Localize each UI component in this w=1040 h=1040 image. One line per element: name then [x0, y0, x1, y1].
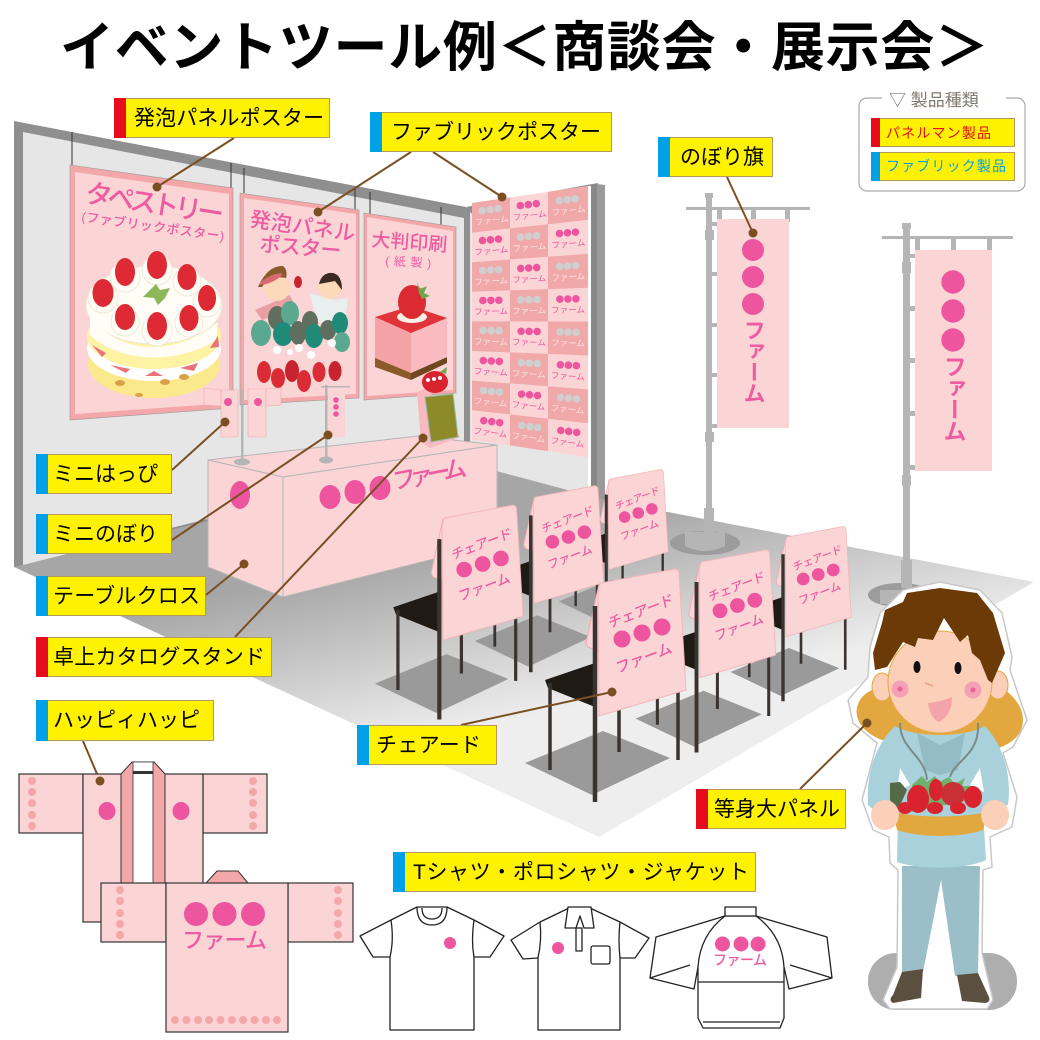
product type legend — [859, 90, 1025, 191]
label: life-size panel — [696, 789, 846, 829]
booth walls — [14, 121, 605, 567]
chair: back row left: チェアード — [450, 525, 513, 563]
label: nobori flag — [658, 137, 772, 177]
children and strawberries illustration — [251, 266, 350, 392]
fabric poster checker wall: ファーム — [512, 305, 546, 316]
shoes — [890, 969, 923, 1003]
label: foam panel poster — [114, 98, 330, 138]
jacket — [868, 726, 1009, 868]
leader dot: happi — [96, 776, 104, 786]
fabric poster checker wall: ファーム — [551, 204, 586, 218]
chair: front row middle — [636, 550, 776, 753]
poster: tapestry with cake — [70, 165, 233, 420]
hair — [873, 588, 1005, 683]
cake illustration — [86, 251, 222, 398]
panel white outline — [848, 582, 1027, 1009]
ears — [872, 673, 892, 701]
chair: back row middle: ファーム — [546, 542, 594, 572]
label: life-size panel: 等身大パネル — [714, 798, 840, 821]
happi coat front — [19, 762, 267, 922]
fabric poster checker wall: ファーム — [551, 305, 585, 315]
poster: foam panel with children: ポスター — [259, 233, 342, 263]
label: fabric poster — [370, 112, 612, 152]
fabric poster checker wall: ファーム — [550, 403, 585, 416]
label: chair ad — [357, 725, 496, 765]
label: nobori flag: のぼり旗 — [680, 146, 764, 169]
leader lines — [83, 138, 872, 789]
pants — [902, 866, 980, 976]
fabric poster checker wall: ファーム — [512, 241, 547, 254]
chair: front row right: チェアード — [792, 544, 843, 574]
label: fabric poster: ファブリックポスター — [391, 121, 601, 144]
fabric poster checker wall: ファーム — [512, 337, 546, 348]
foam panel title: 発泡パネル — [248, 208, 356, 246]
paper note: (紙製) — [385, 254, 432, 270]
left flag text: ファーム — [740, 319, 766, 403]
title: イベントツール例＜商談会・展示会＞ — [60, 18, 989, 78]
fabric poster checker wall: ファーム — [474, 244, 509, 257]
t-shirt — [360, 907, 504, 1030]
happi logo text: ファーム — [182, 928, 267, 953]
label: T-shirt polo jacket — [393, 852, 756, 892]
chair: front row left large — [525, 569, 686, 802]
fabric poster checker wall: ファーム — [511, 430, 546, 444]
legend: fabric — [871, 152, 1014, 181]
chair: back row middle — [475, 486, 604, 672]
chair: back row right: ファーム — [619, 517, 660, 544]
label: T-shirt polo jacket: Tシャツ・ポロシャツ・ジャケット — [413, 861, 749, 884]
poster: foam panel with children — [240, 193, 359, 405]
chair: front row middle: ファーム — [713, 611, 765, 644]
label: happi happi — [36, 700, 214, 741]
legend: panelman: パネルマン製品 — [886, 125, 991, 141]
fabric poster checker wall: ファーム — [474, 366, 508, 378]
face — [888, 631, 992, 733]
chair: front row right: ファーム — [797, 579, 842, 608]
basket — [893, 812, 987, 836]
chair: back row right: チェアード — [615, 485, 661, 513]
table cloth logo text: ファーム — [391, 455, 468, 496]
label: happi happi: ハッピィハッピ — [53, 709, 200, 732]
chair: front row middle: チェアード — [707, 569, 766, 604]
label: table cloth: テーブルクロス — [53, 585, 200, 608]
tapestry title: タペストリー — [83, 178, 226, 230]
fabric poster checker wall — [472, 186, 588, 457]
label: chair ad: チェアード — [376, 734, 481, 757]
mini nobori flag — [319, 385, 350, 464]
happi coat back — [101, 871, 353, 1032]
legend: panelman — [871, 118, 1014, 147]
hands — [871, 800, 899, 830]
fabric poster checker wall: ファーム — [473, 426, 508, 440]
fabric poster checker wall: ファーム — [474, 336, 508, 347]
fabric poster checker wall: ファーム — [551, 370, 585, 382]
jacket: ファーム — [713, 952, 767, 968]
mini happi coats — [204, 388, 281, 466]
nobori flag left — [670, 193, 810, 555]
legend: fabric: ファブリック製品 — [886, 158, 1006, 174]
right flag text: ファーム — [940, 355, 966, 442]
fabric poster checker wall: ファーム — [473, 396, 508, 409]
chair: front row right — [730, 526, 851, 701]
fabric poster checker wall: ファーム — [512, 209, 547, 223]
chair: front row left large: ファーム — [614, 640, 674, 678]
chair: back row middle: チェアード — [540, 504, 595, 536]
label: foam panel poster: 発泡パネルポスター — [134, 107, 324, 130]
floor — [14, 455, 1034, 837]
life-size panel character — [848, 582, 1027, 1010]
polo shirt — [511, 907, 649, 1030]
jacket — [650, 907, 832, 1028]
label: mini happi — [36, 454, 172, 494]
fabric poster checker wall: ファーム — [511, 399, 546, 412]
tabletop catalog stand — [417, 367, 460, 448]
fabric poster checker wall: ファーム — [474, 213, 509, 227]
table cloth — [208, 436, 497, 597]
strawberries — [890, 776, 982, 814]
label: mini nobori: ミニのぼり — [53, 523, 158, 546]
label: mini nobori — [36, 514, 172, 554]
chair: back row right — [559, 469, 668, 628]
label: catalog stand: 卓上カタログスタンド — [53, 646, 265, 669]
fabric poster checker wall: ファーム — [551, 338, 585, 348]
poster: large format print with mousse — [364, 213, 456, 400]
tapestry subtitle: (ファブリックポスター) — [81, 209, 225, 244]
fabric poster checker wall: ファーム — [474, 306, 508, 317]
chair: back row left — [375, 505, 523, 719]
fabric poster checker wall: ファーム — [550, 435, 585, 449]
mousse illustration — [375, 282, 447, 380]
chair: back row left: ファーム — [457, 569, 512, 604]
legend heading: ▽ 製品種類 — [889, 91, 979, 110]
chair: front row left large: チェアード — [607, 591, 675, 631]
fabric poster checker wall: ファーム — [551, 237, 586, 250]
fabric poster checker wall: ファーム — [474, 275, 508, 287]
fabric poster checker wall: ファーム — [512, 273, 546, 285]
label: mini happi: ミニはっぴ — [53, 463, 158, 486]
nobori flag right — [868, 223, 1013, 607]
large print title: 大判印刷 — [371, 229, 448, 256]
fabric poster checker wall: ファーム — [551, 271, 585, 283]
label: catalog stand — [36, 637, 272, 677]
label: table cloth — [36, 576, 206, 616]
fabric poster checker wall: ファーム — [512, 368, 546, 380]
